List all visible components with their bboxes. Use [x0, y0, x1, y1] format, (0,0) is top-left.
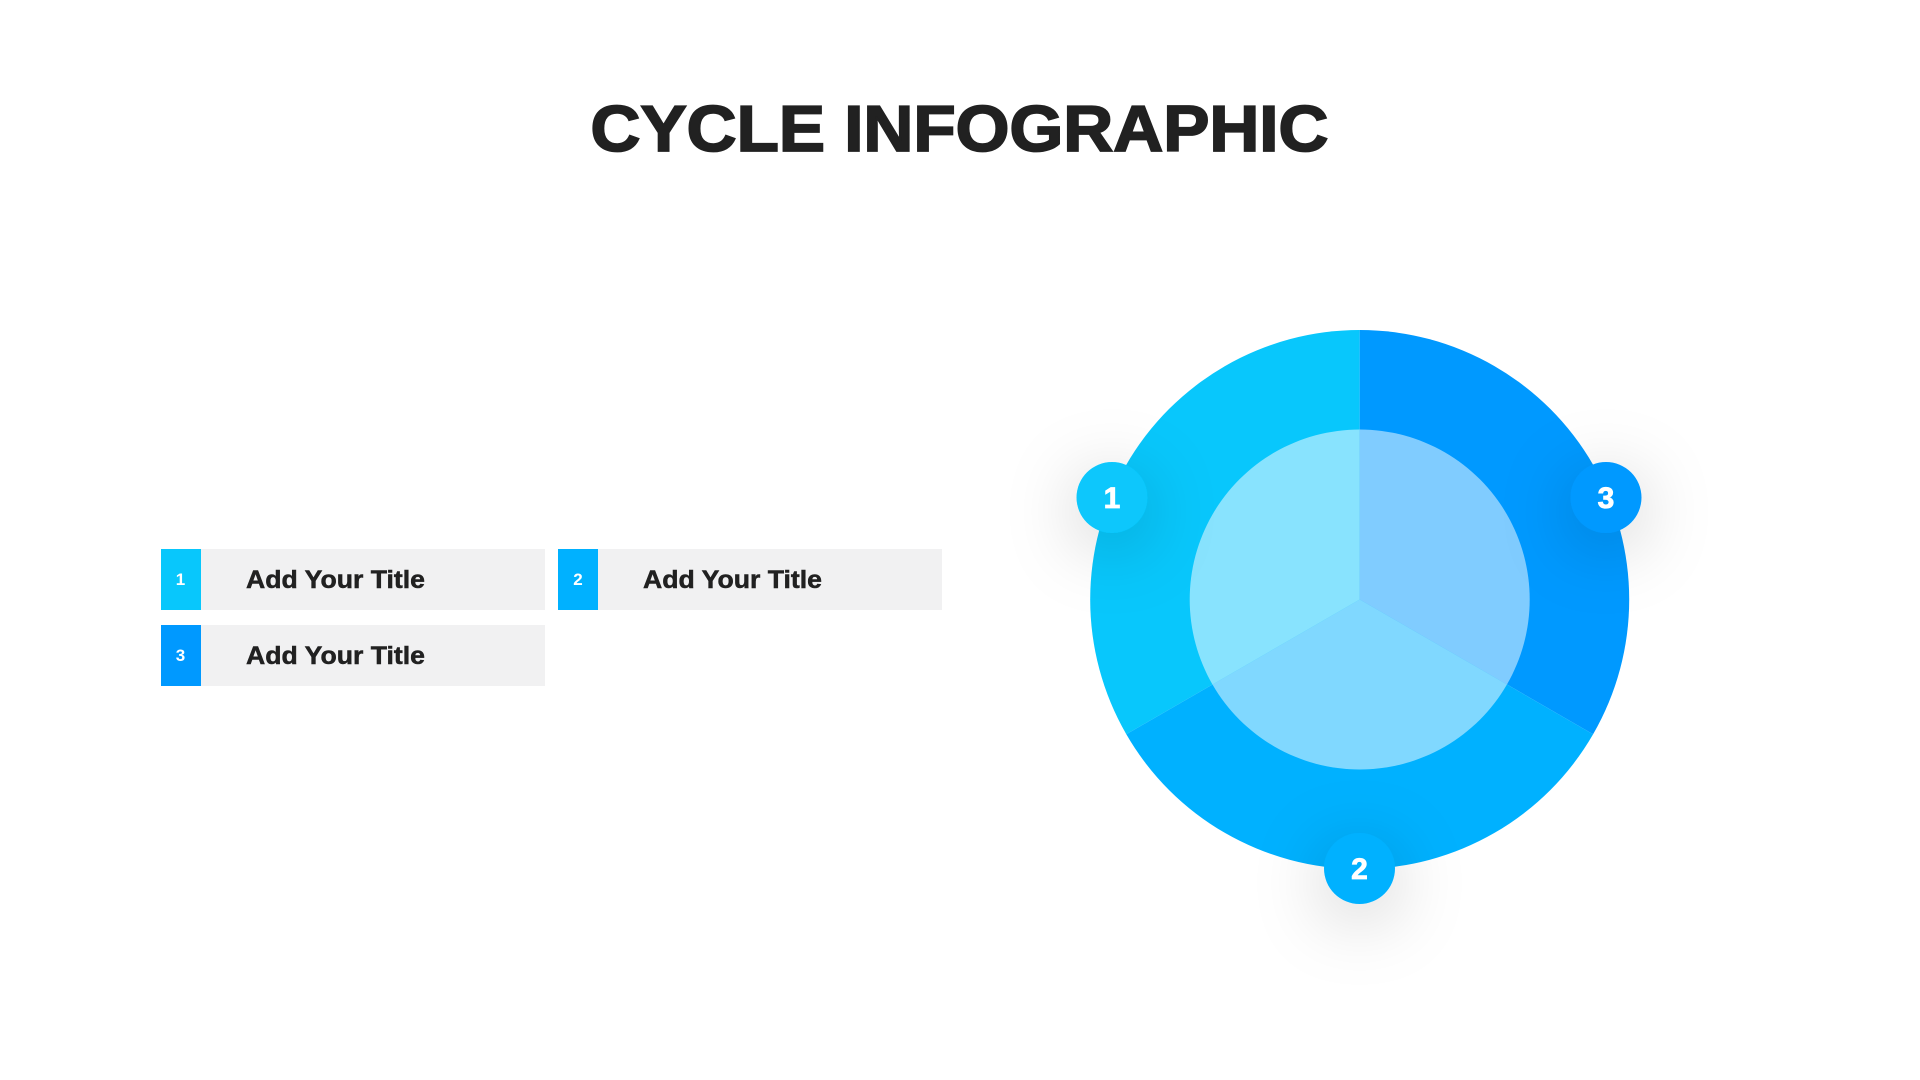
legend list	[161, 549, 942, 686]
outer segment 1	[1090, 330, 1360, 734]
inner segment 2	[1212, 600, 1507, 769]
inner segment 3	[1360, 430, 1530, 684]
legend item 3: 3	[176, 646, 185, 665]
legend item 1: 1	[176, 570, 185, 589]
title: CYCLE INFOGRAPHIC	[590, 92, 1328, 165]
legend item 1: Add Your Title	[246, 566, 425, 594]
legend item 2: Add Your Title	[643, 566, 822, 594]
legend item 2: 2	[573, 570, 583, 589]
cycle diagram	[1076, 330, 1642, 904]
inner segment 1	[1190, 430, 1360, 684]
badge 2	[1324, 833, 1395, 904]
legend item 2	[558, 549, 942, 610]
badge 1	[1076, 462, 1148, 533]
legend item 3: Add Your Title	[246, 642, 425, 670]
badge 3	[1570, 462, 1642, 533]
legend item 3	[161, 625, 545, 686]
outer segment 3	[1360, 330, 1629, 734]
badge 1: 1	[1104, 482, 1120, 515]
badge 2: 2	[1351, 853, 1368, 886]
badge 3: 3	[1598, 482, 1614, 515]
outer segment 2	[1126, 600, 1593, 869]
legend item 1	[161, 549, 545, 610]
